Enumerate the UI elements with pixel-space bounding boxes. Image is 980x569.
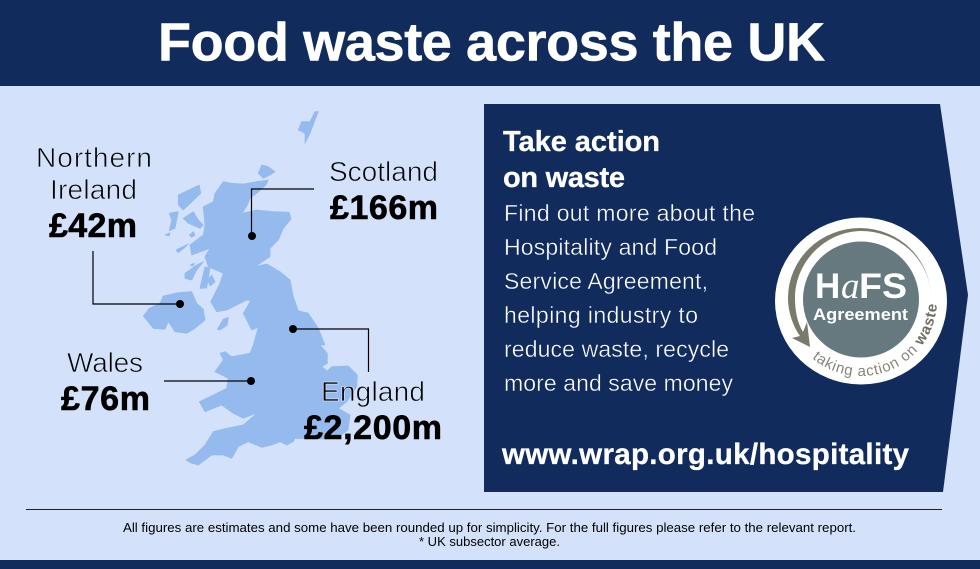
label: England: £2,200m [304, 409, 442, 447]
leader line: England [289, 325, 368, 372]
title banner: Food waste across the UK [158, 12, 825, 72]
panel heading: on waste [503, 162, 625, 194]
label: Northern Ireland: Northern [36, 142, 152, 173]
title banner [0, 0, 980, 86]
panel body text: helping industry to [504, 302, 698, 328]
panel body text: Service Agreement, [504, 268, 708, 294]
logo: HaFS Agreement [775, 218, 947, 384]
map of the UK [143, 112, 357, 465]
label: Scotland: £166m [330, 189, 438, 227]
label: England: England [321, 376, 425, 407]
panel body text: reduce waste, recycle [504, 336, 729, 362]
panel body text: Hospitality and Food [504, 234, 717, 260]
leader line: Scotland [248, 189, 314, 240]
Great Britain [186, 180, 357, 465]
logo wordmark: H [815, 267, 840, 306]
label: Scotland [329, 156, 438, 227]
footnote: * UK subsector average. [419, 534, 560, 549]
Shetland [298, 112, 318, 143]
label: Northern Ireland [36, 142, 152, 245]
Western Isles and Inner Hebrides [178, 185, 201, 210]
panel body text: Find out more about the [504, 200, 755, 226]
website link: www.wrap.org.uk/hospitality [501, 438, 910, 471]
label: Northern Ireland: £42m [49, 207, 137, 245]
label: Wales: Wales [67, 347, 143, 378]
Northern Ireland [143, 292, 205, 333]
logo: HaFS Agreement: Agreement [813, 306, 909, 324]
logo arrow [788, 228, 931, 347]
footnote [123, 520, 856, 549]
logo: HaFS Agreement: a [841, 266, 860, 307]
label: Wales [61, 347, 150, 418]
label: Wales: £76m [61, 380, 150, 418]
panel heading [503, 126, 660, 194]
label: England [304, 376, 442, 447]
leader line: Northern Ireland [93, 251, 184, 308]
label: Northern Ireland: Ireland [50, 174, 137, 205]
logo tagline: taking action on waste [813, 304, 937, 378]
divider [26, 508, 942, 510]
panel heading: Take action [503, 126, 660, 158]
panel: take action [484, 104, 968, 492]
panel body text [504, 200, 755, 396]
footnote: All figures are estimates and some have been rounded up for simplicity. For the full figures please refer to the relevant report. [123, 520, 856, 535]
leader line: Wales [164, 377, 255, 385]
panel body text: more and save money [504, 370, 734, 396]
bottom bar [0, 560, 980, 569]
logo: HaFS Agreement: FS [859, 267, 907, 306]
label: Scotland: Scotland [329, 156, 438, 187]
Orkney [258, 165, 275, 178]
Isle of Man [217, 317, 228, 330]
